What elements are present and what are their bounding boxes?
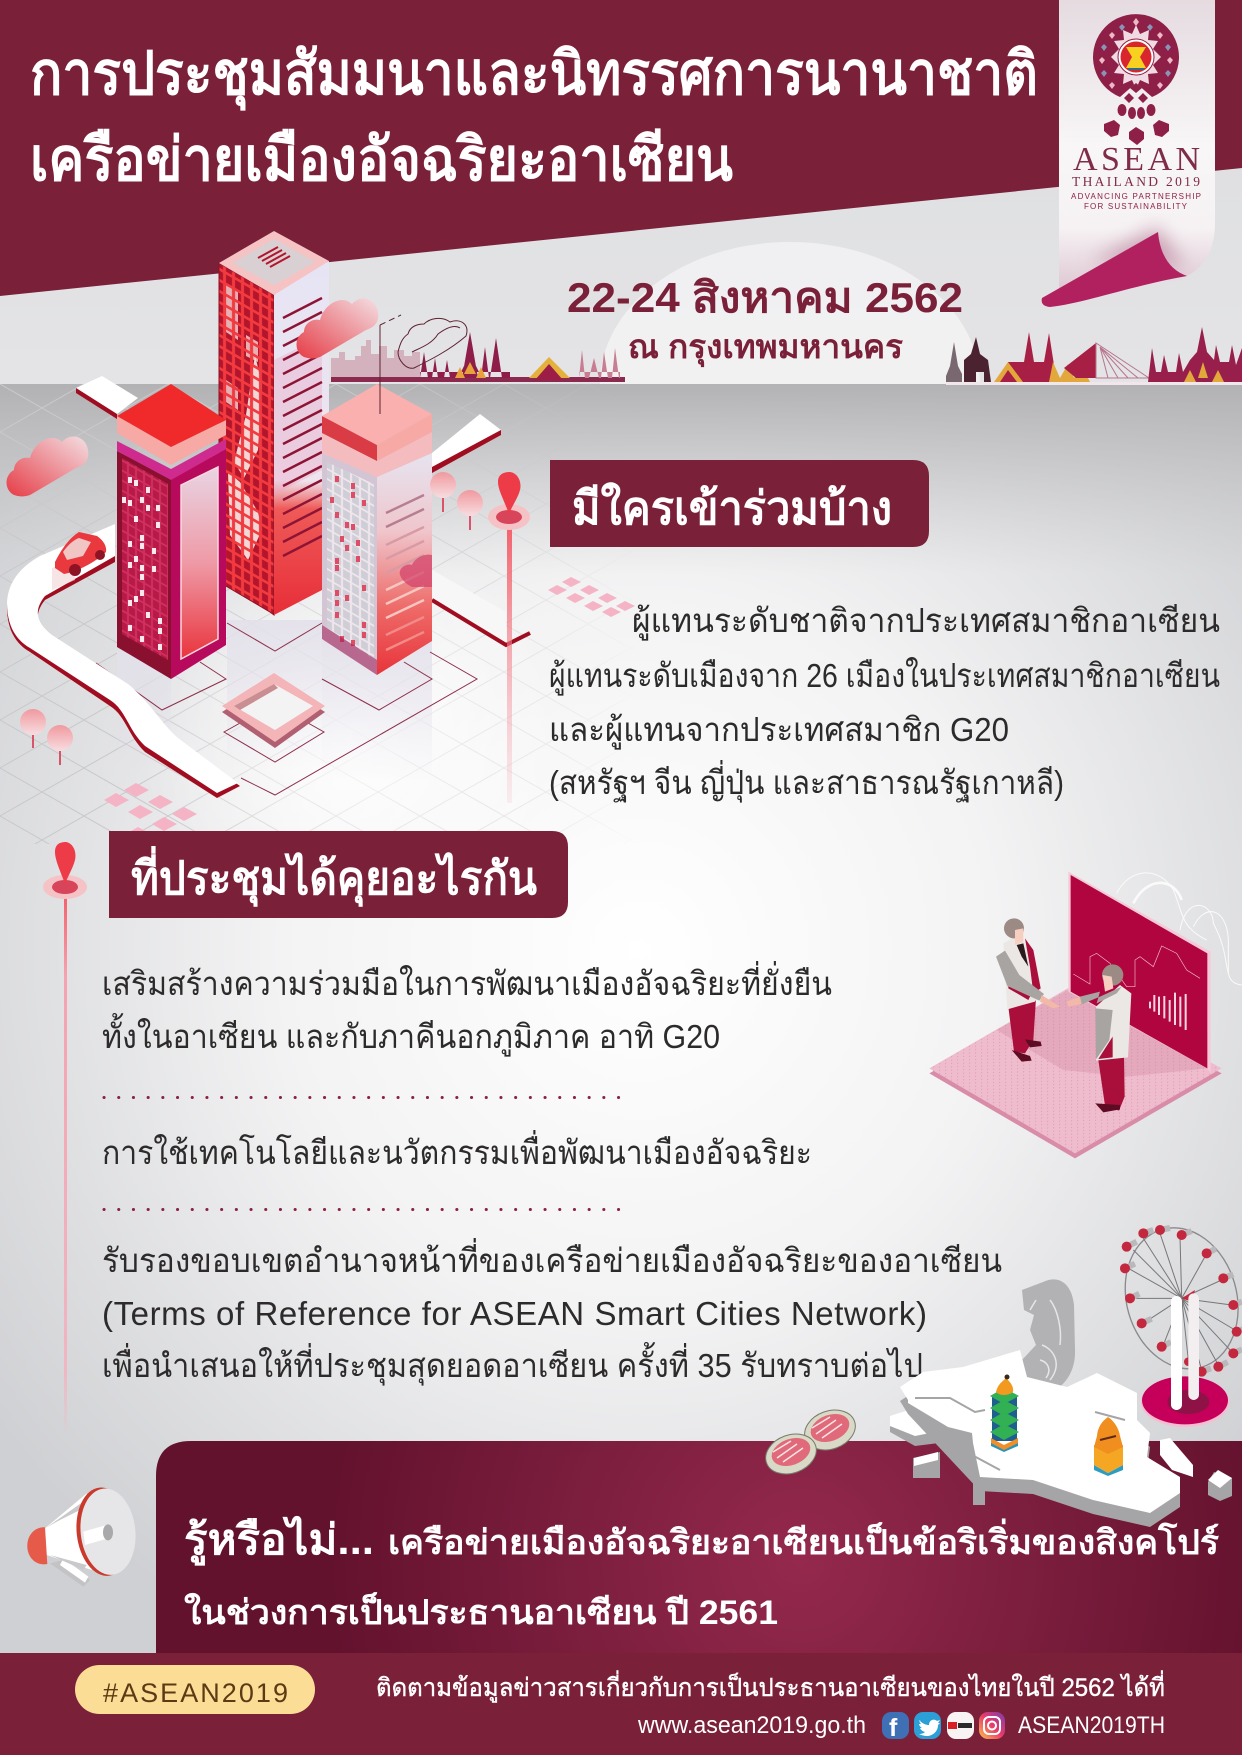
trees <box>20 472 483 765</box>
handshake illustration <box>929 872 1242 1158</box>
building reflections <box>117 620 432 780</box>
main title: การประชุมสัมมนาและนิทรรศการนานาชาติ <box>30 40 1038 111</box>
decorative cookies <box>760 1403 861 1481</box>
bottom did you know panel <box>156 1441 1242 1653</box>
island map <box>890 1350 1232 1527</box>
main title <box>30 40 1038 193</box>
megaphone icon <box>27 1485 140 1587</box>
person one <box>996 918 1060 1062</box>
ASEAN Thailand 2019 ribbon logo: FOR SUSTAINABILITY <box>1084 202 1188 211</box>
attendees text: ผู้แทนระดับชาติจากประเทศสมาชิกอาเซียน <box>632 602 1220 641</box>
icon: twitter <box>914 1712 941 1739</box>
heading: who attends <box>550 460 929 547</box>
left building <box>117 384 226 679</box>
map pin two with timeline <box>43 842 87 1435</box>
outline cloud and dashed antenna <box>380 315 467 380</box>
icon: youtube talk <box>947 1712 974 1739</box>
person two <box>1067 964 1131 1112</box>
attendees text: และผู้แทนจากประเทศสมาชิก G20 <box>549 711 1009 750</box>
website url: www.asean2019.go.th <box>637 1712 866 1739</box>
point two: การใช้เทคโนโลยีและนวัตกรรมเพื่อพัฒนาเมืองอัจฉริยะ <box>102 1130 812 1171</box>
skyline left <box>331 332 625 382</box>
tall tower <box>219 231 329 615</box>
right building <box>322 325 432 675</box>
platform <box>929 987 1222 1158</box>
attendees text: (สหรัฐฯ จีน ญี่ปุ่น และสาธารณรัฐเกาหลี) <box>549 760 1064 803</box>
icon: facebook <box>882 1712 909 1742</box>
floor ring <box>222 673 325 748</box>
icon: instagram <box>979 1712 1005 1739</box>
point one <box>102 961 832 1057</box>
ASEAN Thailand 2019 ribbon logo: ADVANCING PARTNERSHIP <box>1071 192 1201 201</box>
point three: เพื่อนำเสนอให้ที่ประชุมสุดยอดอาเซียน ครั้งที่ 35 รับทราบต่อไป <box>102 1342 923 1386</box>
orange temple <box>1094 1417 1123 1476</box>
point three: รับรองขอบเขตอำนาจหน้าที่ของเครือข่ายเมืองอัจฉริยะของอาเซียน <box>102 1238 1002 1279</box>
floor grid <box>0 384 590 844</box>
floor outlines <box>96 623 477 795</box>
point three: (Terms of Reference for ASEAN Smart Cities Network) <box>102 1295 927 1332</box>
smart city illustration <box>6 231 635 841</box>
point one: ทั้งในอาเซียน และกับภาคีนอกภูมิภาค อาทิ G20 <box>102 1013 720 1057</box>
logo emblem <box>1093 14 1179 145</box>
social handle: ASEAN2019TH <box>1018 1712 1165 1739</box>
header band <box>0 0 1242 296</box>
did you know text: เครือข่ายเมืองอัจฉริยะอาเซียนเป็นข้อริเริ่มของสิงคโปร์ <box>388 1518 1220 1562</box>
ferris wheel <box>1109 1214 1242 1427</box>
ASEAN Thailand 2019 ribbon logo: THAILAND 2019 <box>1072 174 1200 189</box>
ASEAN Thailand 2019 ribbon logo <box>1042 0 1215 307</box>
did you know text: รู้หรือไม่... <box>184 1515 374 1566</box>
pink squares <box>104 577 635 841</box>
red car <box>52 532 106 590</box>
event date and place: ณ กรุงเทพมหานคร <box>628 328 903 368</box>
wire arches <box>1117 873 1242 985</box>
skyline right <box>946 327 1242 385</box>
presentation wall <box>1068 872 1211 1073</box>
discussion points <box>102 961 1002 1386</box>
main title: เครือข่ายเมืองอัจฉริยะอาเซียน <box>30 126 733 193</box>
ASEAN Thailand 2019 ribbon logo: ASEAN <box>1073 141 1200 178</box>
heading: what was discussed <box>109 831 568 918</box>
hashtag pill: #ASEAN2019 <box>103 1678 288 1708</box>
map pin one <box>488 472 530 803</box>
heading: who attends: มีใครเข้าร่วมบ้าง <box>572 481 892 534</box>
follow text: ติดตามข้อมูลข่าวสารเกี่ยวกับการเป็นประธานอาเซียนของไทยในปี 2562 ได้ที่ <box>376 1670 1165 1703</box>
Singapore illustration <box>890 1214 1242 1527</box>
attendees text <box>549 602 1220 803</box>
point one: เสริมสร้างความร่วมมือในการพัฒนาเมืองอัจฉริยะที่ยั่งยืน <box>102 961 832 1002</box>
merlion <box>1022 1279 1075 1393</box>
green pagoda <box>990 1374 1019 1452</box>
point three <box>102 1238 1002 1386</box>
event date and place <box>567 274 963 368</box>
red clouds <box>6 298 432 587</box>
hashtag pill <box>75 1665 315 1714</box>
heading: what was discussed: ที่ประชุมได้คุยอะไรกัน <box>131 846 538 907</box>
footer band <box>0 1653 1242 1755</box>
ribbon page curl <box>1042 232 1187 307</box>
icon: facebook: f <box>889 1714 898 1742</box>
event date and place: 22-24 สิงหาคม 2562 <box>567 274 963 321</box>
did you know text <box>184 1515 1220 1632</box>
white road <box>7 376 530 798</box>
did you know text: ในช่วงการเป็นประธานอาเซียน ปี 2561 <box>184 1591 778 1632</box>
